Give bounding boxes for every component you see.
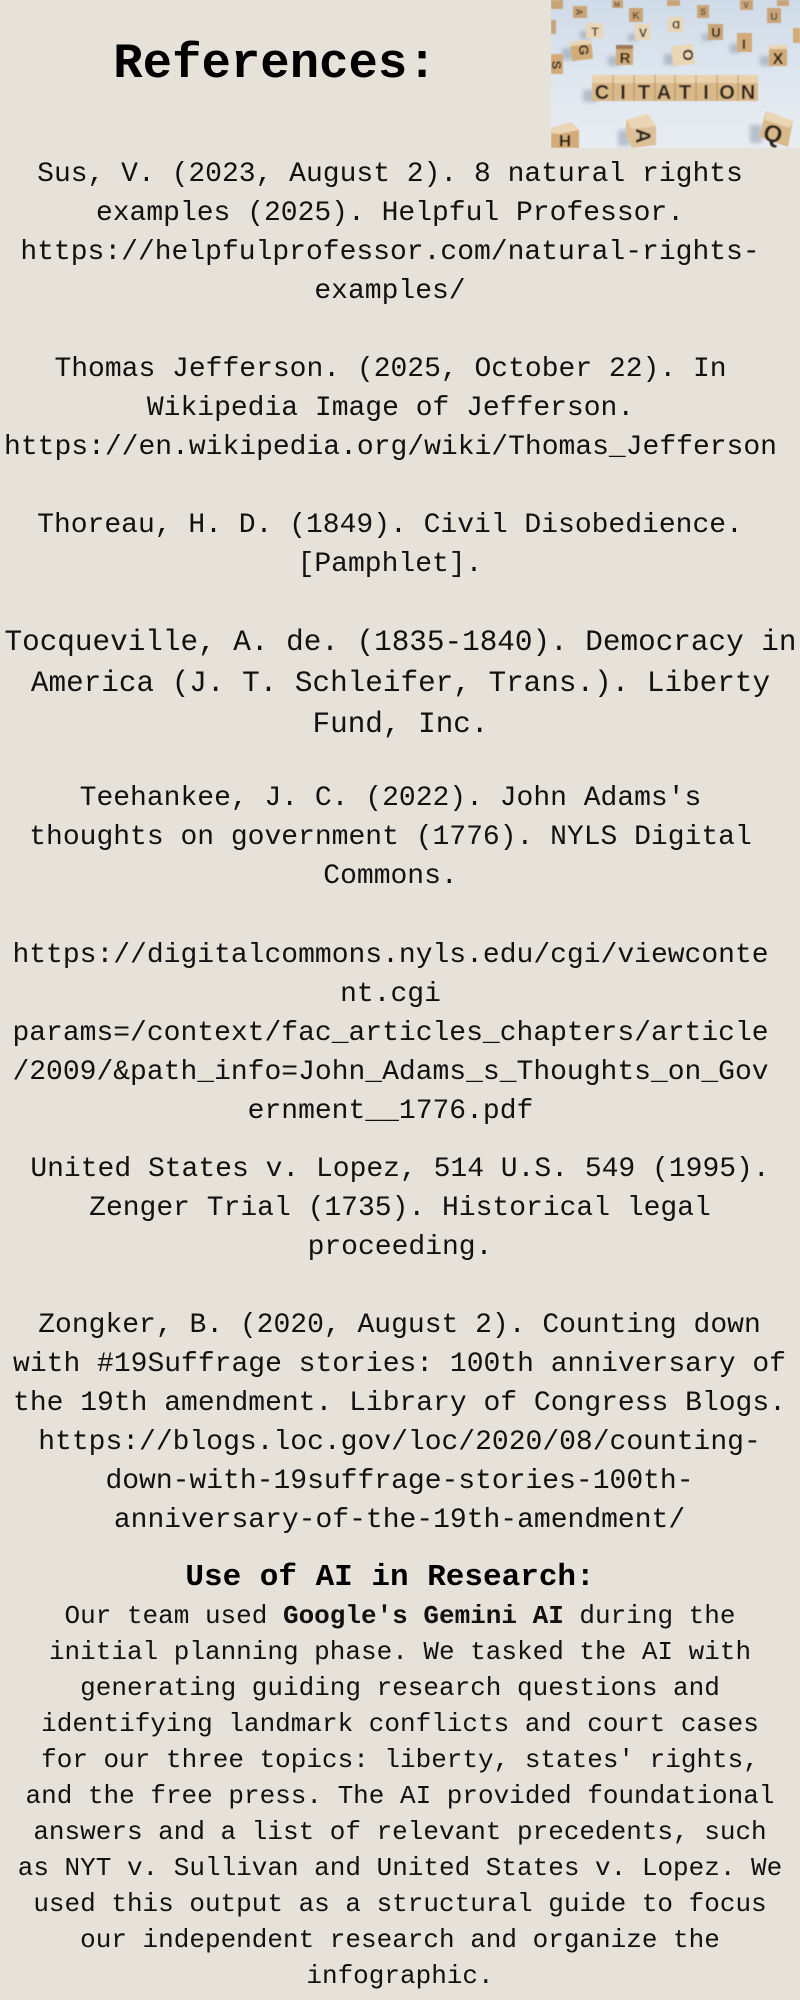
reference: Teehankee link: /2009/&path_info=John_Adams_s_Thoughts_on_Gov [12, 1057, 769, 1088]
far blocks: A [574, 9, 584, 16]
reference: Tocqueville [4, 626, 796, 741]
reference: Teehankee: Teehankee, J. C. (2022). John Adams's [80, 783, 701, 814]
reference: Sus: examples/ [314, 276, 466, 307]
reference: Teehankee link: nt.cgi [340, 979, 441, 1010]
citation row: I [620, 82, 626, 104]
text block: use of AI [18, 1601, 782, 1991]
reference: Zongker: down-with-19suffrage-stories-100th- [105, 1466, 694, 1497]
text block: use of AI: infographic. [306, 1961, 494, 1991]
image: citation wooden letter blocks: O [679, 49, 696, 61]
mid blocks [586, 23, 603, 38]
text block: use of AI: initial planning phase. We tasked the AI with [49, 1637, 751, 1667]
image: citation wooden letter blocks: D [672, 18, 680, 30]
image: citation wooden letter blocks: G [576, 45, 592, 56]
reference: Thomas Jefferson: Thomas Jefferson. (2025, October 22). In [54, 354, 727, 385]
text block: use of AI: generating guiding research questions and [80, 1673, 720, 1703]
near blocks [551, 122, 579, 148]
citation row: T [679, 82, 691, 104]
reference: Zongker: anniversary-of-the-19th-amendment/ [114, 1505, 685, 1536]
reference: Lopez and Zenger [30, 1154, 770, 1263]
reference: Lopez and Zenger: Zenger Trial (1735). Historical legal [89, 1193, 711, 1224]
reference: Teehankee [29, 783, 752, 892]
reference: Thoreau: Thoreau, H. D. (1849). Civil Disobedience. [37, 510, 743, 541]
image: citation wooden letter blocks: R [620, 50, 631, 67]
image: citation wooden letter blocks [551, 0, 800, 148]
reference: Sus [20, 159, 760, 307]
far blocks: S [700, 7, 706, 17]
citation row: T [638, 82, 650, 104]
text block: use of AI: as NYT v. Sullivan and United States v. Lopez. We [18, 1853, 782, 1883]
reference: Thomas Jefferson: Wikipedia Image of Jefferson. [147, 393, 634, 424]
reference: Tocqueville: Fund, Inc. [312, 708, 488, 741]
reference: Thomas Jefferson [4, 354, 777, 463]
text block: use of AI: for our three topics: liberty, states' rights, [41, 1745, 759, 1775]
citation row: I [703, 82, 709, 104]
reference: Tocqueville: Tocqueville, A. de. (1835-1840). Democracy in [4, 626, 796, 659]
reference: Thoreau: [Pamphlet]. [298, 549, 482, 580]
reference: Thomas Jefferson: https://en.wikipedia.org/wiki/Thomas_Jefferson [4, 432, 777, 463]
reference: Sus: Sus, V. (2023, August 2). 8 natural rights [37, 159, 743, 190]
reference: Zongker: the 19th amendment. Library of Congress Blogs. [13, 1388, 786, 1419]
reference: Zongker: with #19Suffrage stories: 100th anniversary of [13, 1349, 786, 1380]
reference: Zongker [13, 1310, 786, 1536]
far blocks: V [743, 1, 749, 10]
reference: Lopez and Zenger: proceeding. [308, 1232, 492, 1263]
reference: Lopez and Zenger: United States v. Lopez, 514 U.S. 549 (1995). [30, 1154, 770, 1185]
text block: use of AI: used this output as a structural guide to focus [33, 1889, 767, 1919]
image: citation wooden letter blocks: V [639, 26, 647, 40]
text block: use of AI: Our team used Google's Gemini AI during the [65, 1601, 735, 1631]
reference: Zongker: https://blogs.loc.gov/loc/2020/08/counting- [38, 1427, 761, 1458]
reference: Teehankee link: ernment__1776.pdf [248, 1096, 533, 1127]
image: citation wooden letter blocks: U [711, 25, 721, 40]
reference: Thoreau [37, 510, 743, 580]
reference: Teehankee link: https://digitalcommons.nyls.edu/cgi/viewconte [12, 940, 769, 971]
citation row: A [657, 82, 671, 104]
image: citation wooden letter blocks: X [773, 51, 784, 68]
citation row [592, 75, 758, 104]
title: References: [113, 36, 437, 92]
citation row: O [719, 82, 735, 104]
reference: Sus: https://helpfulprofessor.com/natural-rights- [20, 237, 760, 268]
image: citation wooden letter blocks: I [742, 36, 746, 52]
image: citation wooden letter blocks: T [591, 25, 599, 39]
far blocks: K [632, 11, 640, 22]
text block: use of AI: identifying landmark conflicts and court cases [41, 1709, 759, 1739]
image: citation wooden letter blocks: A [631, 128, 654, 144]
reference: Teehankee: thoughts on government (1776). NYLS Digital [29, 822, 752, 853]
citation row: C [595, 82, 609, 104]
reference: Tocqueville: America (J. T. Schleifer, Trans.). Liberty [31, 667, 770, 700]
far blocks: M [614, 2, 620, 9]
text block: use of AI: our independent research and organize the [80, 1925, 720, 1955]
heading: use of AI: Use of AI in Research: [185, 1560, 595, 1595]
reference: Teehankee link: params=/context/fac_articles_chapters/article [12, 1018, 769, 1049]
reference: Teehankee link [12, 940, 769, 1127]
reference: Sus: examples (2025). Helpful Professor. [96, 198, 684, 229]
text block: use of AI: answers and a list of relevant precedents, such [33, 1817, 767, 1847]
citation row: N [741, 82, 755, 104]
block shadows [562, 31, 772, 146]
far blocks [551, 0, 789, 34]
reference: Zongker: Zongker, B. (2020, August 2). Counting down [38, 1310, 761, 1341]
text block: use of AI: and the free press. The AI provided foundational [26, 1781, 774, 1811]
reference: Teehankee: Commons. [323, 861, 458, 892]
far blocks: U [770, 12, 778, 23]
